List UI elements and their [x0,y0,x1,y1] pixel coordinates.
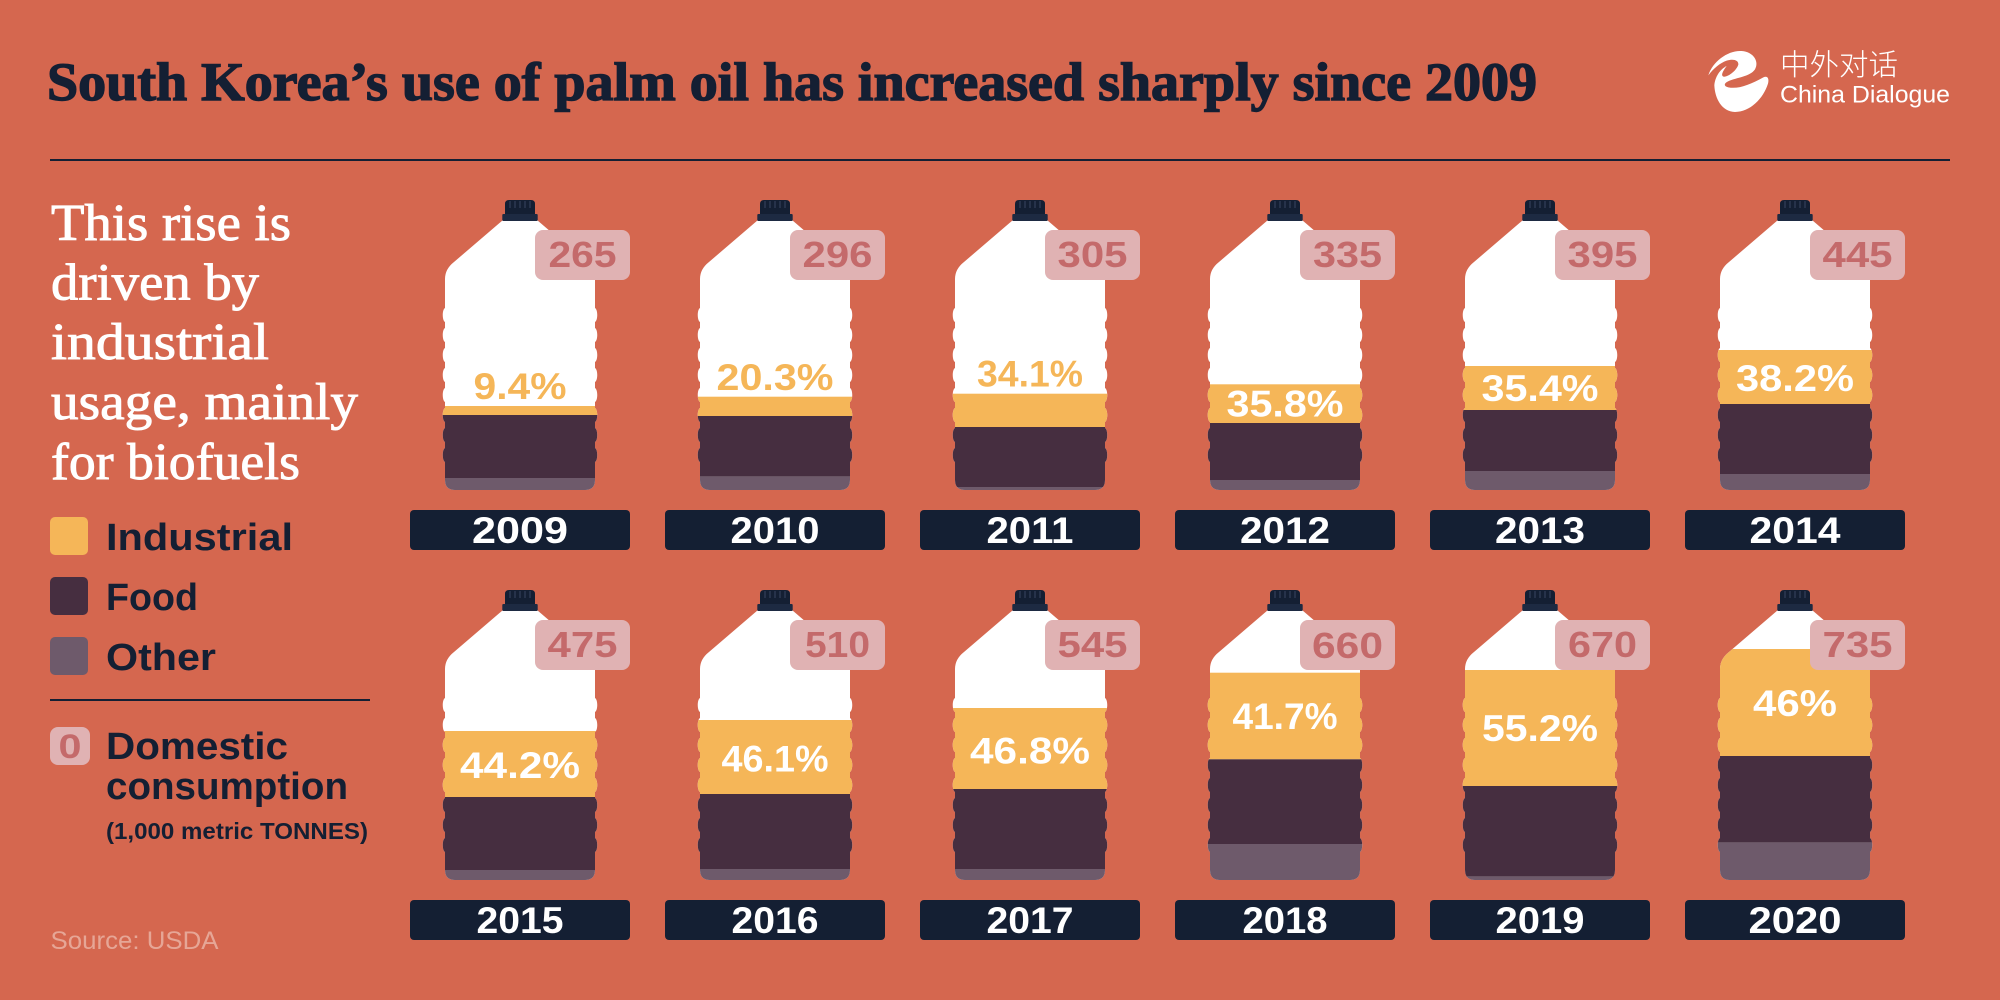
bottle: 2009 [410,200,630,551]
bottle: 2009: 2009 [472,510,568,551]
bottle: 2012: 2012 [1240,510,1330,551]
lead text: for biofuels [51,434,300,491]
bottle: 2010: 20.3% [716,357,834,398]
bottle: 2015: 44.2% [460,745,580,786]
bottle: 2016 [665,590,885,941]
bottle: 2017: 545 [1058,624,1128,665]
bottle: 2016: 46.1% [722,738,828,779]
bottle: 2012: 335 [1313,234,1382,275]
bottle: 2020 [1685,590,1905,941]
bottle: 2013: 35.4% [1482,368,1598,409]
legend: domestic consumption [50,726,368,844]
bottle: 2017 [920,590,1140,941]
bottle: 2010 [665,200,885,551]
header rule [50,159,1950,161]
bottle: 2011 [920,200,1140,551]
bottle: 2014 [1685,200,1905,551]
bottle: 2018: 2018 [1242,900,1328,941]
bottle: 2017: 2017 [986,900,1074,941]
bottle: 2011: 34.1% [977,354,1083,395]
lead text: usage, mainly [51,374,358,431]
legend: industrial: Industrial [106,517,293,559]
bottle: 2010: 296 [802,234,872,275]
title: South Korea’s use of palm oil has increased sharply since 2009 [47,52,1537,112]
legend: domestic consumption: Domestic [106,726,288,768]
bottle: 2013: 395 [1568,234,1638,275]
bottle: 2012: 35.8% [1226,384,1344,425]
legend: other [50,637,216,679]
bottle: 2016: 510 [805,624,870,665]
legend: domestic consumption: 0 [58,728,82,766]
bottle: 2011: 305 [1058,234,1128,275]
lead text [51,195,358,491]
lead text: driven by [51,254,259,312]
bottle: 2020: 2020 [1748,900,1842,941]
bottle: 2015: 475 [548,624,618,665]
logo text: Chinese name: 中外对话 [1780,49,1898,82]
bottle: 2018 [1175,590,1395,941]
bottle: 2013 [1430,200,1650,551]
source: Source: USDA [50,927,219,955]
logo text: English name: China Dialogue [1780,82,1950,108]
bottle: 2012 [1175,200,1395,551]
bottle: 2013: 2013 [1495,510,1585,551]
legend: domestic consumption: consumption [106,766,348,808]
bottle: 2014: 38.2% [1736,358,1854,399]
lead text: This rise is [51,195,291,252]
bottle: 2014: 445 [1822,234,1892,275]
icon: swirl [1708,51,1768,112]
logo: China Dialogue [1708,49,1950,112]
bottle: 2010: 2010 [730,510,820,551]
legend: food [50,577,198,619]
bottle: 2019: 55.2% [1482,708,1598,749]
legend: domestic consumption: (1,000 metric TONNES) [106,818,368,844]
bottle: 2009: 265 [548,234,616,275]
bottle: 2020: 46% [1753,683,1837,724]
legend [50,517,370,844]
bottle: 2019: 670 [1568,624,1637,665]
legend: other: Other [106,637,216,679]
bottle: 2020: 735 [1822,624,1892,665]
lead text: industrial [51,314,269,371]
bottle: 2015: 2015 [476,900,564,941]
bottle: 2015 [410,590,630,941]
bottle: 2018: 41.7% [1232,696,1338,737]
bottle: 2019 [1430,590,1650,941]
bottle: 2016: 2016 [732,900,818,941]
bottle: 2014: 2014 [1750,510,1841,551]
bottle: 2018: 660 [1312,625,1383,666]
bottle: 2009: 9.4% [474,366,566,407]
bottle: 2017: 46.8% [970,730,1090,771]
legend: food: Food [106,577,198,619]
bottle: 2019: 2019 [1496,900,1584,941]
bottle: 2011: 2011 [986,510,1074,551]
